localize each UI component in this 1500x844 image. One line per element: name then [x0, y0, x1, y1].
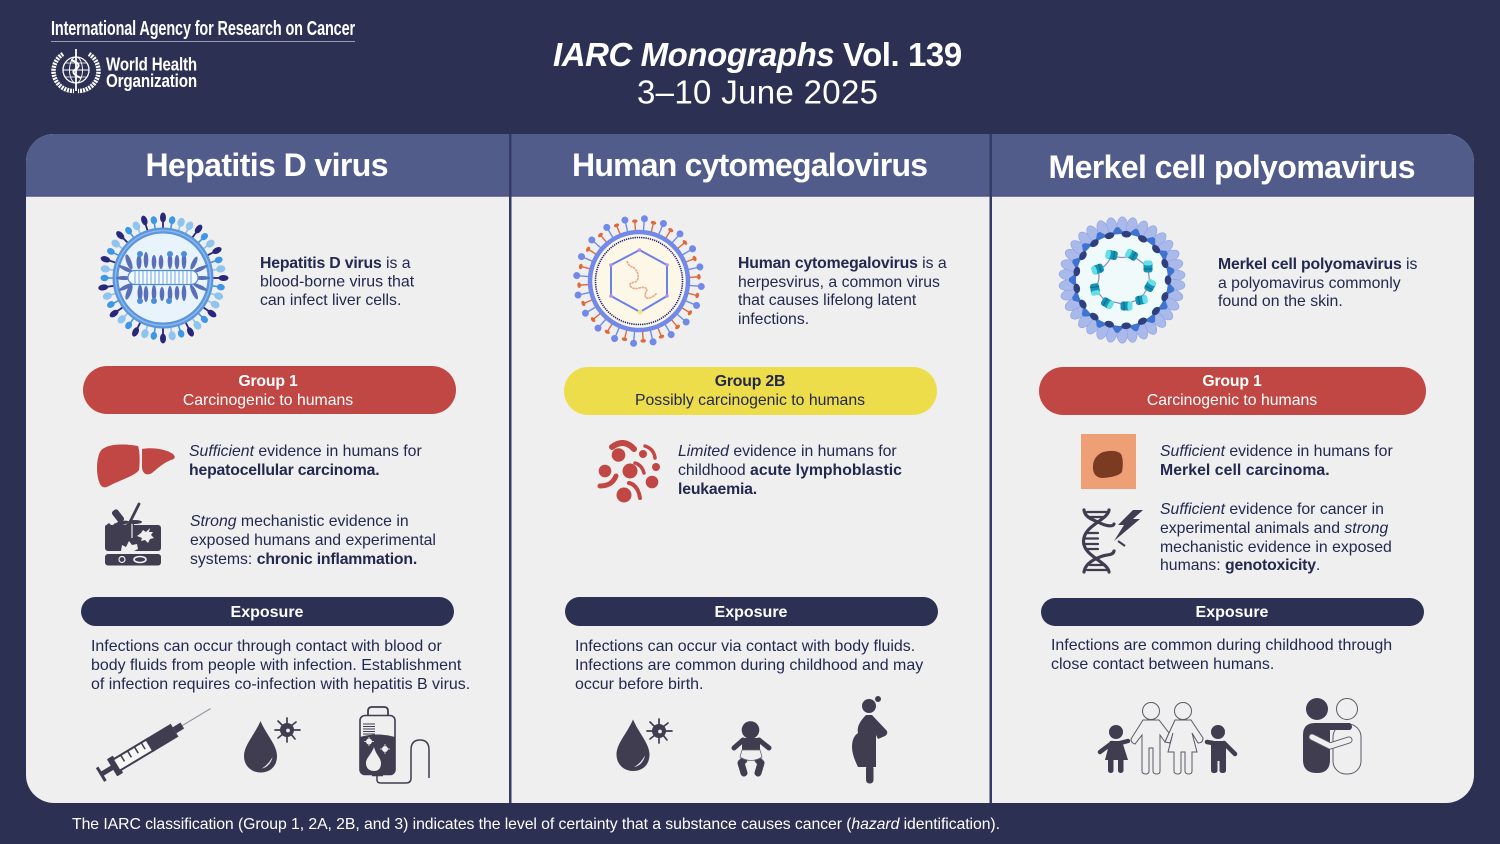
evidence: sufficient: hepatocellular carcinoma.: [189, 462, 379, 479]
exposure text: Infections are common during childhood and may: [575, 657, 923, 674]
exposure text: [1051, 637, 1392, 673]
evidence: sufficient: Sufficient evidence in humans for: [189, 443, 422, 460]
icon: cytomegalovirus particle: [573, 215, 705, 347]
panel background: [26, 134, 1474, 803]
group 1 pill: Group 1: [1202, 373, 1262, 390]
footer note: The IARC classification (Group 1, 2A, 2B, and 3) indicates the level of certainty that a substance causes cancer (hazard identification).: [72, 816, 1000, 833]
group 2B pill: Group 2B: [715, 373, 785, 390]
exposure bar: [1041, 598, 1424, 626]
evidence: limited: Limited evidence in humans for: [678, 443, 897, 460]
evidence: sufficient: [1160, 443, 1393, 479]
icon: polyomavirus particle: [1058, 216, 1187, 344]
evidence: limited: childhood acute lymphoblastic: [678, 462, 902, 479]
evidence: sufficient and strong: [1160, 501, 1392, 574]
group 1 pill: [83, 366, 456, 414]
exposure text: Infections are common during childhood through: [1051, 637, 1392, 654]
title: [553, 36, 962, 110]
exposure text: [575, 638, 923, 693]
icon: pregnant woman: [852, 696, 887, 784]
evidence: sufficient and strong: mechanistic evidence in exposed: [1160, 539, 1392, 556]
icon: syringe: [95, 700, 216, 784]
exposure text: close contact between humans.: [1051, 656, 1274, 673]
icon: damaged DNA: [1083, 510, 1143, 572]
icon: embrace: [1303, 698, 1361, 774]
evidence: sufficient and strong: humans: genotoxicity.: [1160, 557, 1320, 574]
exposure bar: Exposure: [1196, 604, 1269, 621]
description: [260, 255, 415, 309]
title: IARC Monographs Vol. 139: [553, 36, 962, 73]
icon: liver: [97, 444, 175, 487]
exposure text: occur before birth.: [575, 676, 703, 693]
evidence: sufficient: [189, 443, 422, 479]
logo: IARC and WHO: International Agency for Research on Cancer: [51, 18, 355, 40]
description: a polyomavirus commonly: [1218, 275, 1401, 292]
heading: Merkel cell polyomavirus: [1048, 149, 1416, 185]
heading: Human cytomegalovirus: [572, 147, 928, 183]
logo: IARC and WHO: World Health: [106, 54, 197, 74]
logo: IARC and WHO: Organization: [106, 71, 197, 91]
description: blood-borne virus that: [260, 274, 415, 290]
description: [738, 255, 947, 328]
logo: IARC and WHO: [51, 18, 355, 91]
evidence: strong mechanistic: exposed humans and experimental: [190, 532, 436, 549]
description: herpesvirus, a common virus: [738, 274, 940, 291]
heading: Hepatitis D virus: [146, 147, 388, 183]
description: that causes lifelong latent: [738, 292, 917, 309]
icon: family: [1100, 702, 1235, 774]
description: Human cytomegalovirus is a: [738, 255, 947, 272]
icon: chronic inflammation: [105, 504, 161, 566]
evidence: sufficient and strong: Sufficient evidence for cancer in: [1160, 501, 1384, 518]
description: Merkel cell polyomavirus is: [1218, 256, 1417, 273]
group 2B pill: [564, 367, 937, 415]
icon: baby: [734, 721, 769, 773]
icon: skin lesion: [1081, 434, 1136, 489]
evidence: strong mechanistic: [190, 513, 436, 568]
evidence: strong mechanistic: systems: chronic inflammation.: [190, 551, 417, 568]
icon: blood drop with virus: [244, 718, 300, 772]
exposure bar: Exposure: [231, 604, 304, 621]
group 1 pill: Carcinogenic to humans: [1147, 392, 1317, 409]
description: [1218, 256, 1417, 310]
exposure bar: [81, 597, 454, 626]
group 1 pill: Group 1: [238, 373, 298, 390]
exposure text: body fluids from people with infection. Establishment: [91, 657, 462, 674]
evidence: sufficient: Merkel cell carcinoma.: [1160, 462, 1330, 479]
group 1 pill: [1039, 367, 1426, 415]
description: Hepatitis D virus is a: [260, 255, 411, 272]
exposure text: of infection requires co-infection with hepatitis B virus.: [91, 676, 470, 693]
evidence: sufficient and strong: experimental animals and strong: [1160, 520, 1389, 537]
evidence: sufficient: Sufficient evidence in humans for: [1160, 443, 1393, 460]
description: can infect liver cells.: [260, 292, 401, 309]
panel: Human cytomegalovirus: [564, 147, 947, 784]
exposure text: [91, 638, 470, 693]
icon: hepatitis D virus particle: [98, 212, 228, 344]
group 2B pill: Possibly carcinogenic to humans: [635, 392, 865, 409]
icon: blood cells: [599, 443, 660, 502]
icon: WHO emblem: [54, 49, 98, 91]
panel: Hepatitis D virus: [81, 147, 470, 784]
icon: blood drop with virus: [616, 719, 672, 771]
exposure text: Infections can occur via contact with body fluids.: [575, 638, 915, 655]
exposure text: Infections can occur through contact with blood or: [91, 638, 443, 655]
panel: Merkel cell polyomavirus: [1039, 149, 1426, 774]
group 1 pill: Carcinogenic to humans: [183, 392, 353, 409]
description: found on the skin.: [1218, 293, 1343, 310]
description: infections.: [738, 311, 809, 328]
evidence: limited: [678, 443, 902, 498]
exposure bar: [565, 597, 938, 626]
title: 3–10 June 2025: [637, 74, 878, 110]
evidence: limited: leukaemia.: [678, 481, 757, 498]
evidence: strong mechanistic: Strong mechanistic evidence in: [190, 513, 409, 530]
exposure bar: Exposure: [715, 604, 788, 621]
icon: infusion bag: [360, 707, 429, 783]
